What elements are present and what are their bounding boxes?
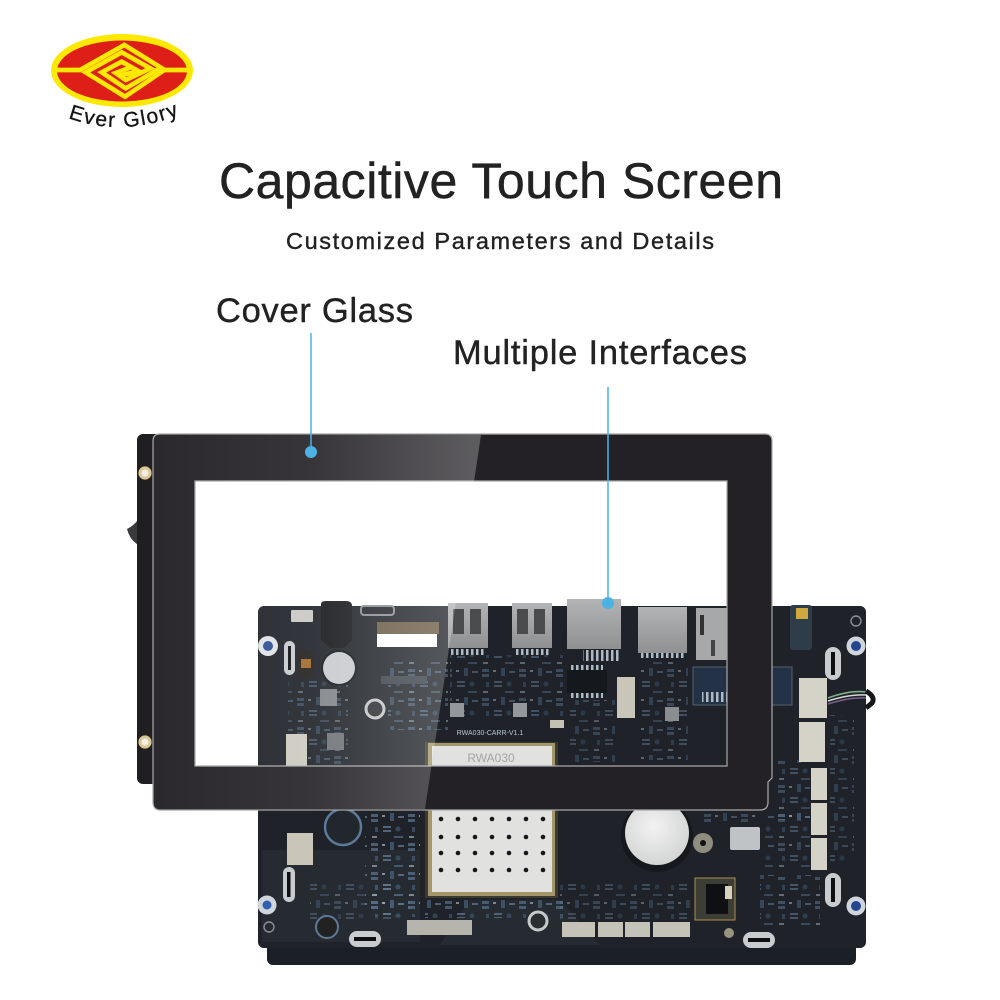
- callout: multiple interfaces: [453, 334, 747, 609]
- bottom slot right: [743, 932, 775, 948]
- gold inductor: [298, 650, 314, 678]
- USB port 2: [512, 603, 552, 655]
- right screw hole upper: [846, 636, 866, 656]
- pin header: [617, 677, 635, 718]
- wireless module: [695, 878, 735, 920]
- module shield holes: [439, 817, 545, 872]
- left screw hole lower: [258, 896, 276, 914]
- flat cable connector: [361, 606, 439, 684]
- mounting ring: lower: [138, 735, 152, 749]
- coin battery: [621, 800, 693, 872]
- right connectors: [799, 678, 827, 870]
- surface mount component fields: [288, 655, 854, 925]
- module label: RWA030: [467, 751, 515, 765]
- callout: cover glass: [216, 292, 413, 458]
- mounting hole centre: [366, 700, 384, 718]
- bottom connectors: [562, 922, 690, 937]
- compute module: [425, 742, 558, 898]
- USB port 1: [448, 603, 488, 655]
- left screw hole upper: [258, 636, 278, 656]
- M.2 slot: [693, 667, 792, 705]
- board markings: RWA030-CARR-V1.1: [457, 730, 523, 737]
- leader line: [607, 387, 609, 603]
- capacitor pad upper: [325, 809, 361, 845]
- power jack: [321, 601, 352, 648]
- brass standoff: [693, 833, 713, 853]
- TF card slot: [638, 607, 687, 658]
- logo emblem: [51, 34, 193, 107]
- lower left connector: [287, 833, 313, 865]
- antenna pad: [724, 928, 734, 938]
- left corner ring: [264, 922, 274, 932]
- callout label: Cover Glass: [216, 292, 413, 330]
- rear panel: bottom edge: [267, 930, 856, 965]
- title: Capacitive Touch Screen: [219, 153, 783, 209]
- headphone jack: [790, 605, 812, 650]
- right corner ring: [851, 616, 861, 626]
- right screw hole lower: [846, 896, 866, 916]
- leader dot: [602, 597, 614, 609]
- logo: Ever Glory: [51, 34, 193, 127]
- leader line: [310, 333, 312, 452]
- glass gloss reflection: [153, 435, 481, 809]
- left slot lower: [283, 867, 295, 902]
- left slot upper: [284, 641, 295, 675]
- ethernet port: [567, 599, 621, 698]
- logo wordmark: Ever Glory: [70, 104, 176, 127]
- callout label: Multiple Interfaces: [453, 334, 747, 372]
- standoff bottom: [529, 912, 547, 930]
- right slot upper: [825, 647, 841, 680]
- cable bundle: [828, 691, 873, 708]
- right slot lower: [825, 873, 841, 907]
- side connector lower left: [286, 734, 307, 766]
- circuit board: [258, 599, 873, 948]
- FPC connector: [407, 920, 472, 935]
- subtitle: Customized Parameters and Details: [286, 228, 714, 254]
- mounting ring: upper: [138, 466, 152, 480]
- cover glass: [153, 434, 772, 810]
- electrolytic capacitor: [321, 650, 357, 686]
- capacitor pad lower left: [316, 916, 338, 938]
- leader dot: [305, 446, 317, 458]
- chips: [320, 689, 337, 706]
- rear panel: left edge: [127, 434, 161, 784]
- display flex connector: [730, 827, 760, 850]
- product illustration: exploded touch screen: [127, 434, 873, 965]
- small connector: [291, 610, 313, 622]
- bottom slot left: [349, 931, 381, 947]
- SIM card slot: [696, 608, 730, 660]
